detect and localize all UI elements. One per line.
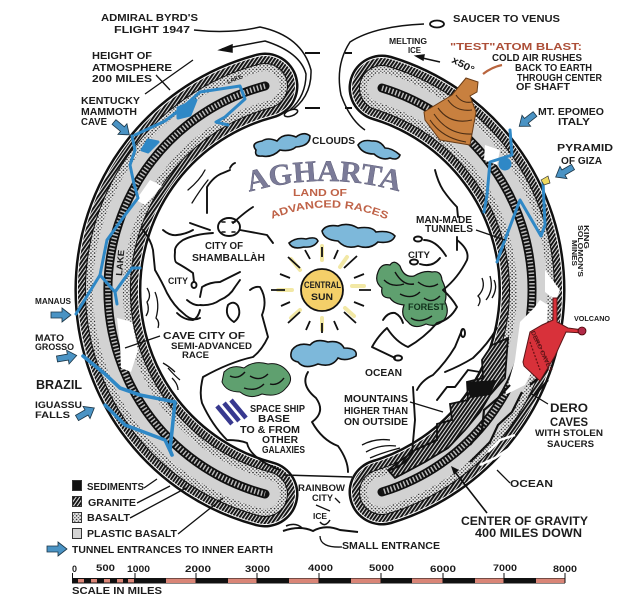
tunnel: Kentucky	[76, 86, 245, 314]
scale bar: 1000	[127, 564, 150, 574]
tunnel: Italy and Giza	[484, 130, 545, 262]
scale bar: 6000	[430, 564, 456, 574]
pyramid of Giza marker	[541, 176, 550, 185]
top labels: ATMOSPHERE	[92, 63, 172, 74]
left labels	[35, 297, 82, 420]
earth shell cross-section	[108, 86, 532, 494]
interior labels: RACE	[182, 350, 209, 360]
top labels: BACK TO EARTH	[515, 63, 592, 74]
interior labels: BASE	[258, 414, 290, 425]
top labels: ITALY	[558, 117, 590, 128]
inner-world coastline lines	[143, 163, 497, 472]
scale bar: 5000	[369, 563, 394, 573]
top labels: HEIGHT OF	[92, 51, 152, 62]
interior labels: CITY	[408, 250, 430, 260]
grove of trees	[222, 363, 291, 397]
blue tunnels	[76, 86, 545, 455]
top labels: ICE	[408, 46, 422, 55]
interior labels: CITY OF	[205, 241, 243, 252]
right labels	[461, 225, 610, 540]
central sun: SUN	[311, 292, 333, 302]
right labels: KING	[582, 225, 589, 250]
right labels: SAUCERS	[547, 439, 594, 449]
top labels: ADMIRAL BYRD'S	[101, 13, 198, 24]
scale bar: SCALE IN MILES	[72, 586, 162, 597]
interior labels: ON OUTSIDE	[344, 417, 408, 428]
atom blast cone	[424, 65, 502, 145]
interior labels: SHAMBALLÀH	[192, 251, 265, 264]
right shell arm	[382, 88, 532, 492]
scale bar: 4000	[308, 563, 333, 573]
legend: GRANITE	[88, 498, 136, 509]
title: Agharta	[248, 161, 400, 219]
right labels: DERO	[550, 401, 588, 415]
interior labels: SPACE SHIP	[250, 404, 305, 415]
interior labels: MAN-MADE	[416, 215, 472, 226]
bottom labels: SMALL ENTRANCE	[342, 541, 440, 552]
tunnel: Brazil	[83, 356, 175, 455]
interior labels: OTHER	[262, 435, 299, 446]
interior labels: DERO CAVES	[529, 330, 553, 373]
scale bar: 7000	[493, 563, 517, 573]
interior labels: FOREST	[408, 302, 445, 312]
interior labels: SEMI-ADVANCED	[171, 341, 253, 351]
legend	[72, 480, 273, 556]
blue entrance arrows	[47, 108, 576, 556]
legend: BASALT	[87, 513, 130, 524]
interior labels: MOUNTAINS	[344, 394, 408, 405]
right labels: OCEAN	[510, 479, 553, 490]
bottom labels: RAINBOW	[298, 483, 346, 493]
top labels: x50°	[450, 55, 476, 76]
leader lines	[125, 60, 548, 547]
top labels: MAMMOTH	[81, 107, 137, 118]
top labels: MELTING	[389, 37, 427, 46]
interior labels: TUNNELS	[425, 224, 473, 235]
top labels: CAVE	[81, 117, 107, 128]
scale bar: 2000	[185, 564, 211, 574]
legend: SEDIMENTS	[87, 482, 144, 493]
interior labels: LAKE	[227, 74, 244, 86]
left labels: GROSSO	[35, 342, 74, 352]
top labels: OF SHAFT	[516, 82, 570, 93]
interior labels: HIGHER THAN	[344, 406, 408, 417]
water squiggles	[146, 276, 496, 458]
legend: TUNNEL ENTRANCES TO INNER EARTH	[72, 545, 273, 556]
right labels: SOLOMON'S	[576, 225, 583, 277]
right labels: CAVES	[550, 415, 588, 429]
title: Agharta: LAND OF	[293, 188, 347, 199]
bottom labels: CITY	[312, 493, 333, 503]
interior labels	[114, 74, 553, 456]
scale bar	[72, 563, 577, 597]
scale bar: 8000	[553, 564, 577, 574]
right labels: MINES	[570, 240, 577, 266]
left labels: MATO	[35, 333, 64, 343]
top labels: THROUGH CENTER	[517, 73, 603, 84]
interior labels: OCEAN	[365, 368, 402, 379]
right labels: VOLCANO	[574, 314, 610, 323]
top labels: KENTUCKY	[81, 96, 140, 107]
flight and saucer paths	[194, 20, 444, 532]
top labels: "TEST"ATOM BLAST:	[450, 42, 582, 53]
title: Agharta: AGHARTA	[248, 161, 400, 192]
right labels: CENTER OF GRAVITY	[461, 514, 588, 528]
central sun: CENTRAL	[304, 280, 341, 290]
left labels: MANAUS	[35, 297, 72, 306]
scale bar: 500	[96, 563, 115, 573]
right labels: 400 MILES DOWN	[475, 526, 582, 540]
top labels: OF GIZA	[561, 156, 602, 167]
bottom labels: ICE	[313, 512, 328, 521]
interior labels: CITY	[168, 276, 188, 286]
scale bar: 0	[72, 564, 77, 574]
clouds	[254, 134, 400, 367]
cave openings in the shell	[117, 145, 560, 395]
central sun	[271, 246, 371, 333]
interior labels: CAVE CITY OF	[163, 331, 245, 342]
bottom labels	[298, 483, 440, 552]
interior labels: TO & FROM	[240, 425, 300, 436]
legend: PLASTIC BASALT	[87, 529, 177, 540]
right labels: WITH STOLEN	[535, 428, 603, 438]
interior labels: LAKE	[114, 249, 126, 276]
left labels: FALLS	[35, 410, 70, 420]
left labels: BRAZIL	[36, 377, 82, 392]
title: Agharta: ADVANCED RACES	[272, 200, 388, 219]
top labels: COLD AIR RUSHES	[492, 53, 582, 64]
top labels: MT. EPOMEO	[538, 107, 604, 118]
dero cave scrawl	[470, 372, 548, 465]
left labels: IGUASSU	[35, 400, 82, 410]
volcano and dero cave	[523, 298, 586, 381]
forest	[377, 262, 447, 327]
top labels: PYRAMID	[557, 143, 613, 154]
top labels: SAUCER TO VENUS	[453, 14, 560, 25]
mountains on inner surface	[388, 338, 508, 478]
space ship bars	[217, 400, 246, 424]
top labels: 200 MILES	[92, 74, 152, 85]
scale bar: 3000	[245, 564, 270, 574]
top labels: FLIGHT 1947	[114, 25, 191, 36]
interior labels: CLOUDS	[312, 136, 355, 147]
interior labels: GALAXIES	[262, 445, 305, 456]
arrow: center of gravity	[451, 466, 487, 513]
left shell arm	[108, 86, 265, 494]
top labels	[81, 13, 613, 167]
